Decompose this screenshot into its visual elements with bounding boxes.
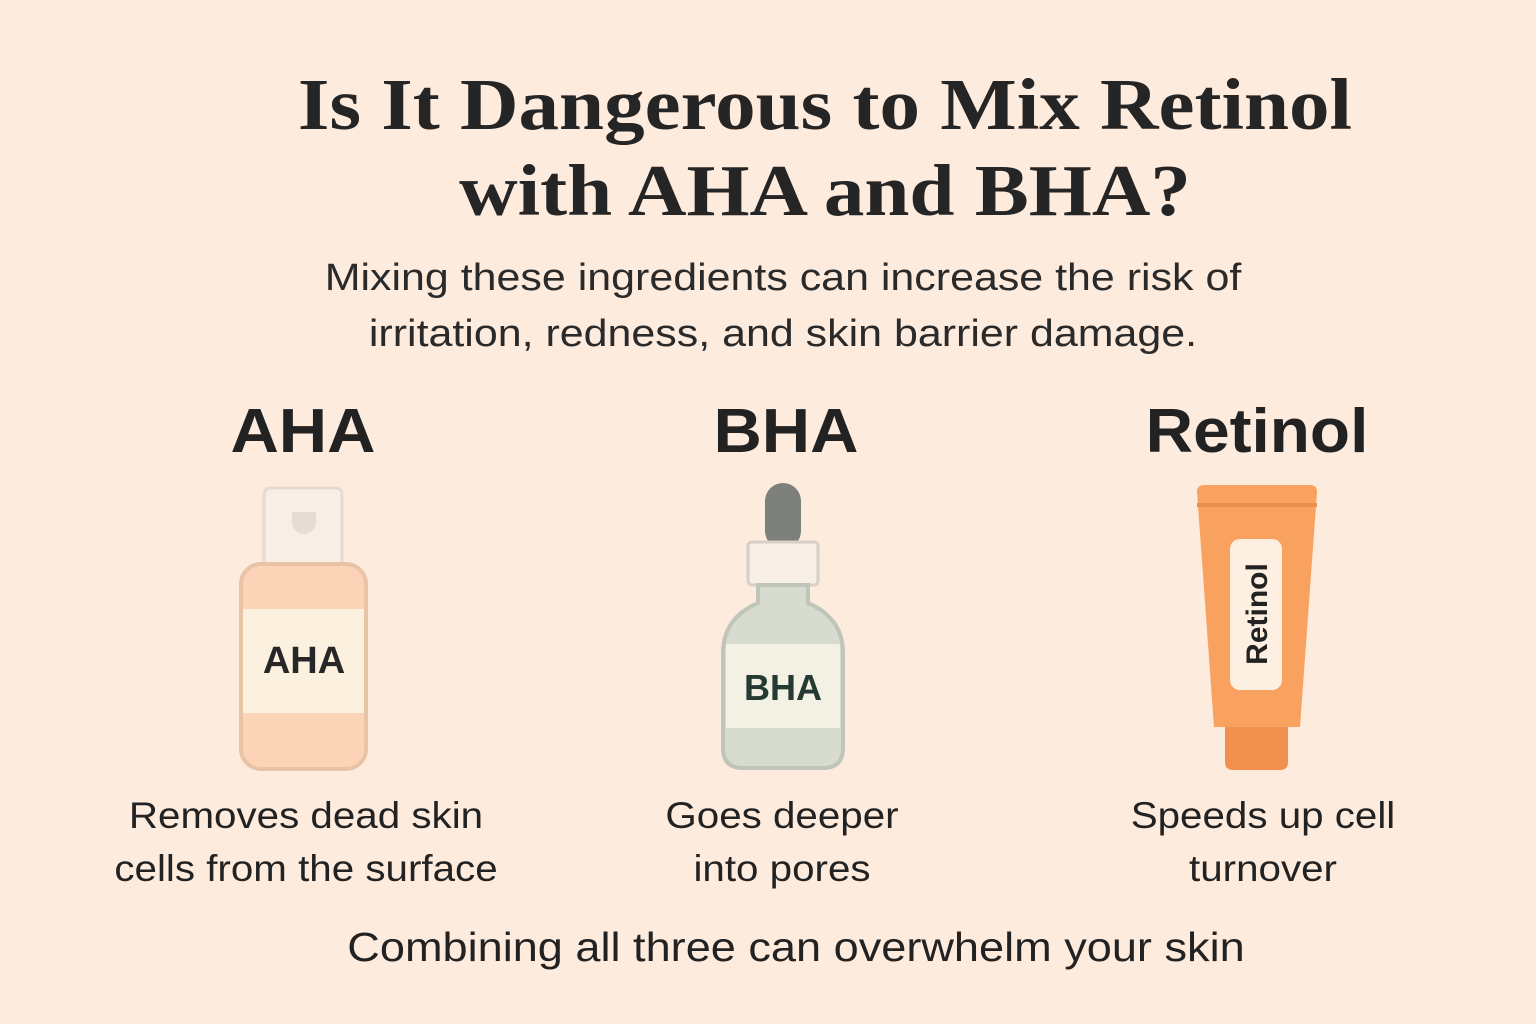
text: Retinol description: turnover (1189, 848, 1337, 889)
icon: BHA dropper bottle (723, 483, 843, 768)
text: BHA description: Goes deeper (665, 795, 899, 836)
text: Retinol description: Speeds up cell (1131, 795, 1395, 836)
subtitle: irritation, redness, and skin barrier damage. (369, 313, 1197, 355)
title: with AHA and BHA? (459, 150, 1191, 231)
subtitle: Mixing these ingredients can increase the risk of (325, 257, 1241, 299)
text: Retinol description (1131, 795, 1395, 889)
icon: Retinol tube (1197, 485, 1317, 770)
text: BHA description (665, 795, 899, 889)
heading: AHA: AHA (230, 397, 376, 466)
icon: BHA dropper bottle: BHA (744, 667, 822, 708)
footer text: Combining all three can overwhelm your skin (347, 924, 1245, 970)
icon: Retinol tube: Retinol (1241, 563, 1274, 665)
heading: BHA: BHA (713, 397, 859, 466)
text: AHA description: cells from the surface (114, 848, 498, 889)
title: Is It Dangerous to Mix Retinol (298, 64, 1352, 145)
text: AHA description: Removes dead skin (129, 795, 483, 836)
icon: AHA bottle (241, 488, 366, 769)
title (298, 64, 1352, 231)
text: BHA description: into pores (693, 848, 871, 889)
heading: Retinol: Retinol (1146, 397, 1368, 466)
icon: AHA bottle: AHA (263, 640, 345, 682)
text: AHA description (114, 795, 498, 889)
subtitle (325, 257, 1242, 355)
